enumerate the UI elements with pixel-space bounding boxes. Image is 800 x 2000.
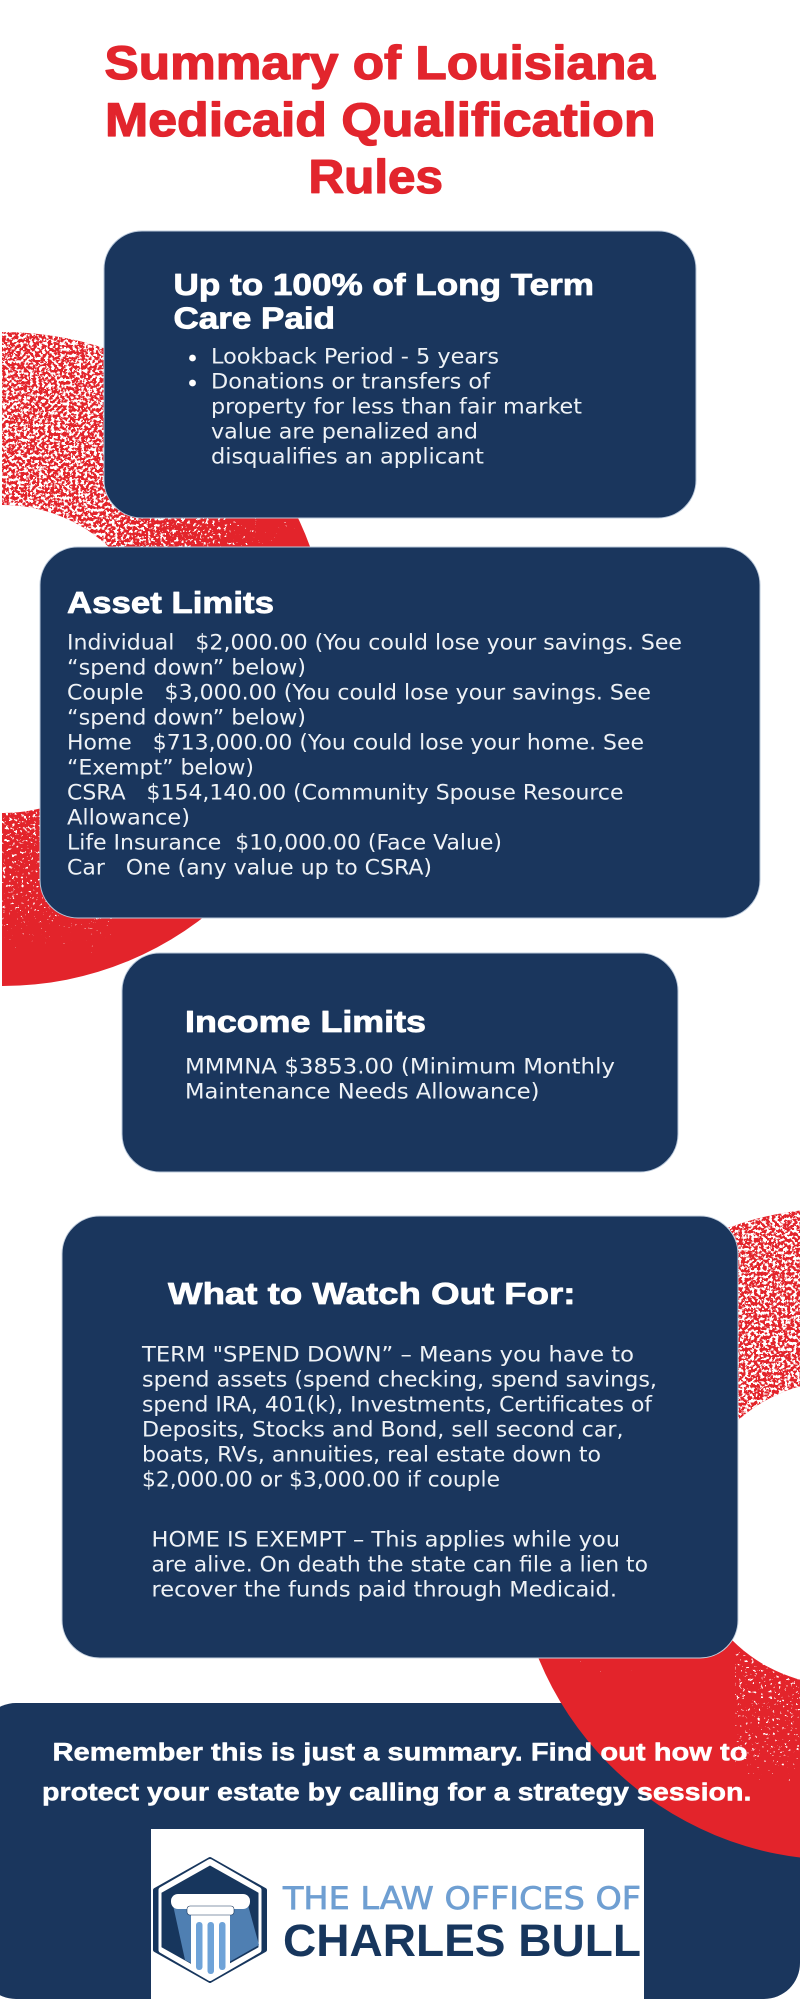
asset limit list: “spend down” below) — [67, 655, 306, 679]
income limit text: MMMNA $3853.00 (Minimum Monthly — [185, 1054, 615, 1078]
spend down explanation: spend IRA, 401(k), Investments, Certificates of — [142, 1393, 653, 1417]
spend down explanation: Deposits, Stocks and Bond, sell second car, — [142, 1418, 624, 1442]
spend down explanation: spend assets (spend checking, spend savings, — [142, 1368, 657, 1392]
title: Medicaid Qualification — [105, 94, 656, 147]
bullet list: lookback and transfers: value are penalized and — [211, 420, 478, 444]
asset limit list: Car One (any value up to CSRA) — [67, 855, 432, 879]
home is exempt explanation: are alive. On death the state can file a lien to — [152, 1553, 648, 1577]
asset limit list: “spend down” below) — [67, 705, 306, 729]
asset limit list: Life Insurance $10,000.00 (Face Value) — [67, 830, 502, 854]
panel: asset limits — [40, 547, 760, 918]
bullet list: lookback and transfers: Lookback Period - 5 years — [211, 345, 499, 369]
panel: long term care — [104, 231, 696, 518]
panel: income limits — [122, 953, 678, 1172]
heading: income limits: Income Limits — [185, 1005, 426, 1039]
icon: hexagon with column — [155, 1859, 265, 1981]
spend down explanation: boats, RVs, annuities, real estate down to — [142, 1443, 601, 1467]
asset limit list: Allowance) — [67, 805, 190, 829]
title — [104, 37, 656, 204]
spend down explanation: TERM "SPEND DOWN” – Means you have to — [141, 1343, 634, 1367]
asset limit list: CSRA $154,140.00 (Community Spouse Resource — [67, 780, 624, 804]
logo wordmark: THE LAW OFFICES OF — [282, 1881, 641, 1917]
bullet list: lookback and transfers: property for less than fair market — [211, 395, 582, 419]
asset limit list: “Exempt” below) — [67, 755, 254, 779]
decorative red speckled arc, right — [538, 1210, 800, 1858]
bullet list: lookback and transfers: disqualifies an applicant — [211, 445, 484, 469]
call to action text — [42, 1739, 751, 1807]
logo: law offices of charles bull — [151, 1829, 644, 1999]
asset limit list: Couple $3,000.00 (You could lose your savings. See — [67, 680, 651, 704]
call to action text: protect your estate by calling for a strategy session. — [42, 1779, 751, 1807]
logo wordmark: CHARLES BULL — [283, 1915, 641, 1966]
home is exempt explanation: HOME IS EXEMPT – This applies while you — [152, 1528, 620, 1552]
asset limit list: Individual $2,000.00 (You could lose your savings. See — [67, 630, 682, 654]
logo wordmark — [282, 1881, 641, 1966]
bullet list: lookback and transfers — [189, 345, 582, 469]
spend down explanation — [141, 1343, 657, 1492]
heading: up to 100%: Care Paid — [174, 302, 335, 336]
heading: up to 100%: Up to 100% of Long Term — [174, 268, 594, 302]
asset limit list — [67, 630, 682, 879]
income limit text — [185, 1054, 615, 1103]
spend down explanation: $2,000.00 or $3,000.00 if couple — [142, 1468, 500, 1492]
asset limit list: Home $713,000.00 (You could lose your home. See — [67, 730, 644, 754]
heading: asset limits: Asset Limits — [67, 586, 274, 620]
home is exempt explanation: recover the funds paid through Medicaid. — [152, 1578, 617, 1602]
panel: what to watch out for — [62, 1216, 738, 1658]
title: Rules — [308, 151, 443, 204]
panel: call to action background — [0, 1703, 800, 1999]
heading: what to watch out for: What to Watch Out For: — [168, 1277, 576, 1311]
title: Summary of Louisiana — [104, 37, 656, 90]
call to action text: Remember this is just a summary. Find out how to — [52, 1739, 748, 1767]
heading: up to 100% — [174, 268, 594, 336]
income limit text: Maintenance Needs Allowance) — [185, 1079, 540, 1103]
home is exempt explanation — [152, 1528, 648, 1602]
decorative red speckled arc, left — [2, 332, 310, 986]
bullet list: lookback and transfers: Donations or transfers of — [211, 370, 491, 394]
